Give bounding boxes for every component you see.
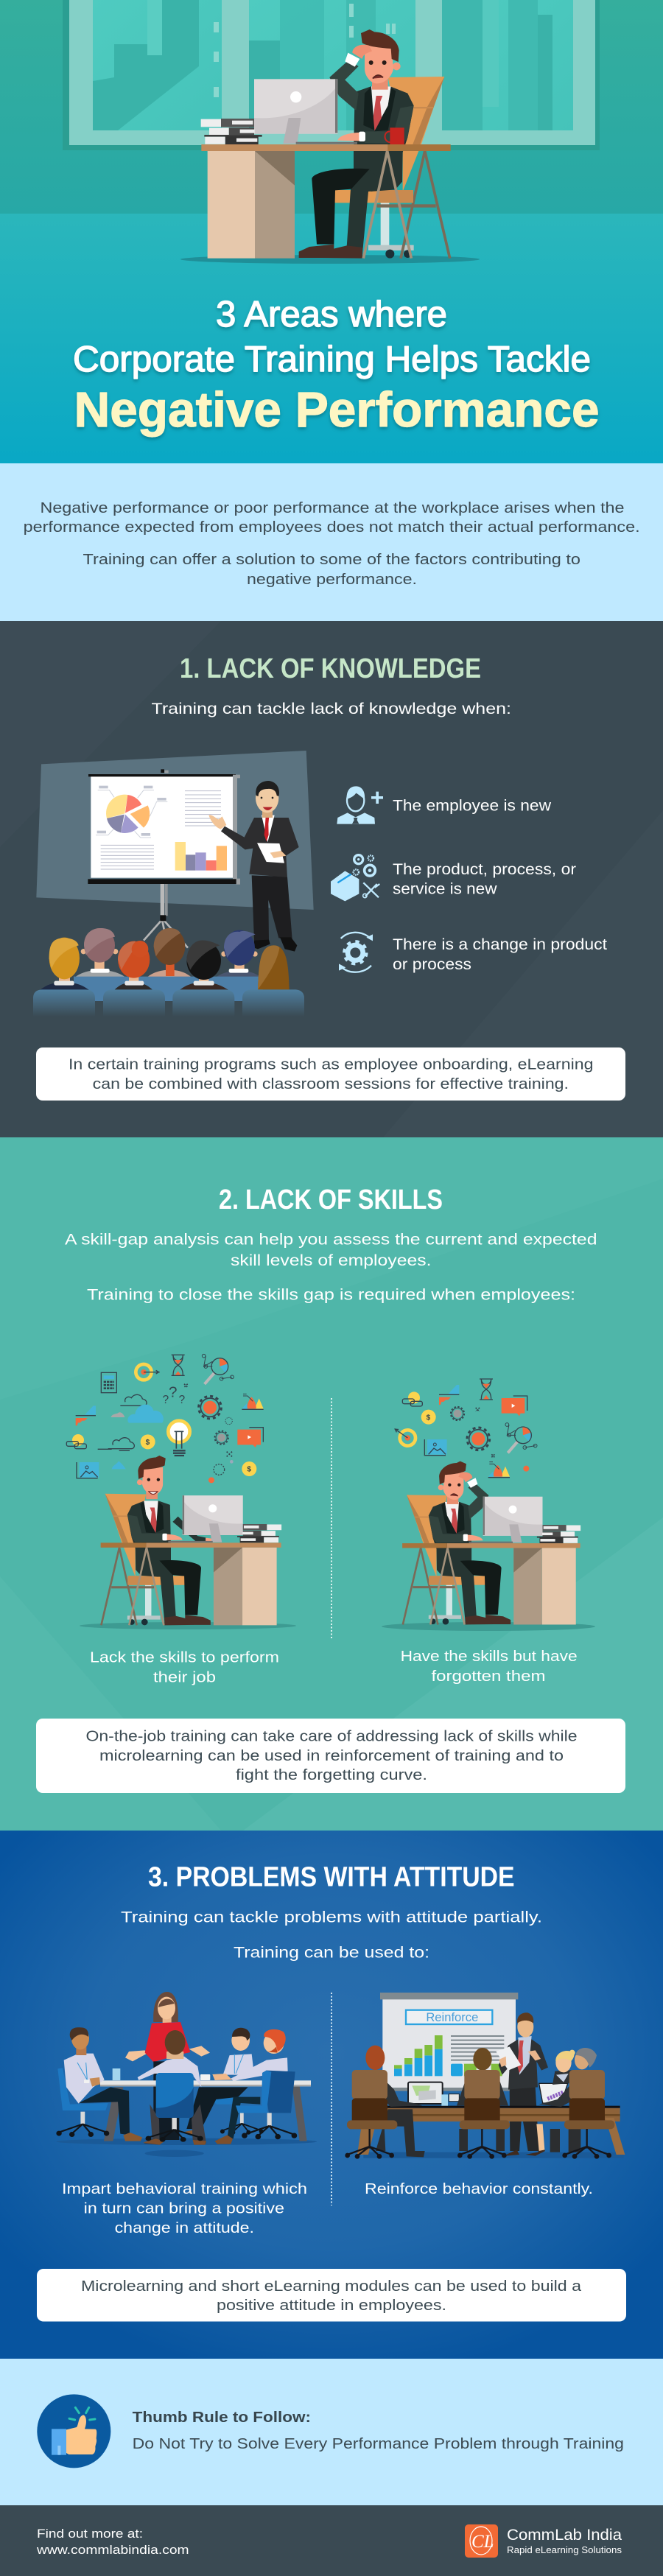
icon: thumbs up — [37, 2394, 110, 2468]
callout box: microlearning can be used in reinforcement of training and to — [99, 1748, 564, 1764]
logo — [465, 2524, 622, 2558]
panel: footer — [0, 2505, 663, 2576]
worried employee at desk — [402, 1461, 580, 1624]
forgetting icons — [390, 1379, 537, 1478]
left seated man — [56, 2027, 142, 2141]
callout box: fight the forgetting curve. — [236, 1767, 427, 1783]
caption: lack the skills — [90, 1650, 279, 1685]
thumb rule text — [133, 2410, 624, 2452]
caption: forgotten skills: forgotten them — [432, 1668, 545, 1685]
illustration: presenter and audience — [33, 751, 314, 1017]
callout box: In certain training programs such as employee onboarding, eLearning — [69, 1057, 594, 1073]
intro paragraph 1: performance expected from employees does not match their actual performance. — [24, 519, 640, 536]
panel: 3 problems with attitude — [0, 1831, 663, 2359]
left seated man — [345, 2046, 425, 2159]
intro paragraph 2: Training can offer a solution to some of the factors contributing to — [83, 552, 580, 568]
board — [380, 1993, 518, 2091]
caption: behavioral training: change in attitude. — [115, 2220, 254, 2236]
intro text: skill levels of employees. — [231, 1252, 432, 1269]
illustration: team meeting — [56, 1992, 317, 2157]
window frame with city view — [63, 0, 600, 150]
audience — [33, 928, 304, 1017]
caption: lack the skills: Lack the skills to perform — [90, 1650, 279, 1666]
happy employee at desk — [101, 1456, 281, 1625]
illustration: reinforce session — [345, 1993, 625, 2159]
callout box: Microlearning and short eLearning modules can be used to build a — [81, 2278, 582, 2295]
icon: new employee — [337, 786, 383, 824]
intro text: Training can be used to: — [234, 1945, 429, 1962]
footer link text — [36, 2527, 189, 2557]
thumb rule text: Thumb Rule to Follow: — [133, 2410, 311, 2426]
callout box: positive attitude in employees. — [217, 2298, 446, 2314]
right seated women — [539, 2048, 614, 2159]
icon: product and process — [331, 855, 379, 901]
subheading: Training can tackle lack of knowledge when: — [152, 701, 511, 717]
intro text: Training can tackle problems with attitude partially. — [121, 1909, 542, 1926]
intro text: Training to close the skills gap is required when employees: — [87, 1287, 575, 1304]
illustration: employee forgot skills — [382, 1379, 595, 1631]
callout box: On-the-job training can take care of addressing lack of skills while — [85, 1729, 578, 1745]
footer link text: www.commlabindia.com — [36, 2543, 189, 2557]
footer link text: Find out more at: — [37, 2527, 143, 2541]
floor shadow — [180, 255, 480, 264]
caption: forgotten skills: Have the skills but have — [401, 1649, 578, 1665]
item text: product new: service is new — [393, 881, 497, 897]
table — [354, 2082, 625, 2155]
caption: behavioral training — [62, 2181, 307, 2236]
intro paragraph 1: Negative performance or poor performance at the workplace arises when the — [40, 500, 625, 516]
callout box — [37, 2269, 626, 2322]
presenter — [208, 781, 299, 952]
board: Reinforce — [426, 2011, 478, 2024]
logo: CL — [471, 2532, 494, 2552]
callout box — [36, 1047, 625, 1101]
item text: the employee is new: The employee is new — [393, 797, 552, 814]
item text: change — [393, 936, 607, 973]
thumb rule text: Do Not Try to Solve Every Performance Problem through Training — [133, 2436, 624, 2452]
item text: change: or process — [393, 956, 471, 973]
panel: thumb rule — [0, 2359, 663, 2505]
heading: 3. PROBLEMS WITH ATTITUDE — [148, 1862, 515, 1893]
illustration: worried employee at desk — [201, 29, 451, 259]
intro paragraph 1 — [24, 500, 640, 536]
illustration: employee lacking skills — [66, 1354, 296, 1629]
idea icons — [66, 1354, 264, 1483]
center seated man — [457, 2048, 510, 2159]
logo: Rapid eLearning Solutions — [507, 2544, 622, 2555]
idea icons: ? — [163, 1394, 169, 1406]
table — [100, 2068, 311, 2141]
front right chair — [215, 2071, 297, 2144]
title: 3 Areas where — [216, 295, 447, 334]
idea icons: ? — [169, 1384, 177, 1401]
title: Corporate Training Helps Tackle — [73, 340, 591, 379]
panel: 1 lack of knowledge — [0, 621, 663, 1137]
man seen from back with chair — [138, 2030, 206, 2145]
title — [73, 295, 599, 438]
standing woman — [125, 1992, 210, 2140]
caption: behavioral training: Impart behavioral training which — [62, 2181, 307, 2197]
panel: introduction — [0, 463, 663, 621]
caption: forgotten skills — [401, 1649, 578, 1685]
caption: behavioral training: in turn can bring a positive — [84, 2201, 284, 2217]
item text: change: There is a change in product — [393, 936, 607, 953]
screen stand — [144, 884, 188, 948]
intro text — [121, 1909, 542, 1962]
panel: hero header — [0, 0, 663, 463]
idea icons: ? — [179, 1394, 185, 1406]
callout box: can be combined with classroom sessions for effective training. — [93, 1076, 569, 1092]
callout box — [36, 1719, 625, 1793]
presenter — [496, 2012, 548, 2156]
item text: product new — [393, 861, 576, 897]
intro text: A skill-gap analysis can help you assess the current and expected — [65, 1231, 597, 1248]
heading: 2. LACK OF SKILLS — [219, 1185, 443, 1215]
icon: change gear — [339, 933, 373, 972]
item text: product new: The product, process, or — [393, 861, 576, 878]
logo: CommLab India — [507, 2527, 622, 2544]
projection screen — [88, 769, 240, 885]
heading: 1. LACK OF KNOWLEDGE — [180, 653, 481, 684]
caption: lack the skills: their job — [153, 1669, 216, 1685]
intro text — [65, 1231, 597, 1304]
intro paragraph 2: negative performance. — [247, 572, 417, 588]
panel: 2 lack of skills — [0, 1137, 663, 1831]
title: Negative Performance — [74, 382, 599, 438]
right seated people — [185, 2028, 288, 2135]
intro paragraph 2 — [83, 552, 580, 588]
caption: reinforce: Reinforce behavior constantly. — [365, 2181, 593, 2197]
